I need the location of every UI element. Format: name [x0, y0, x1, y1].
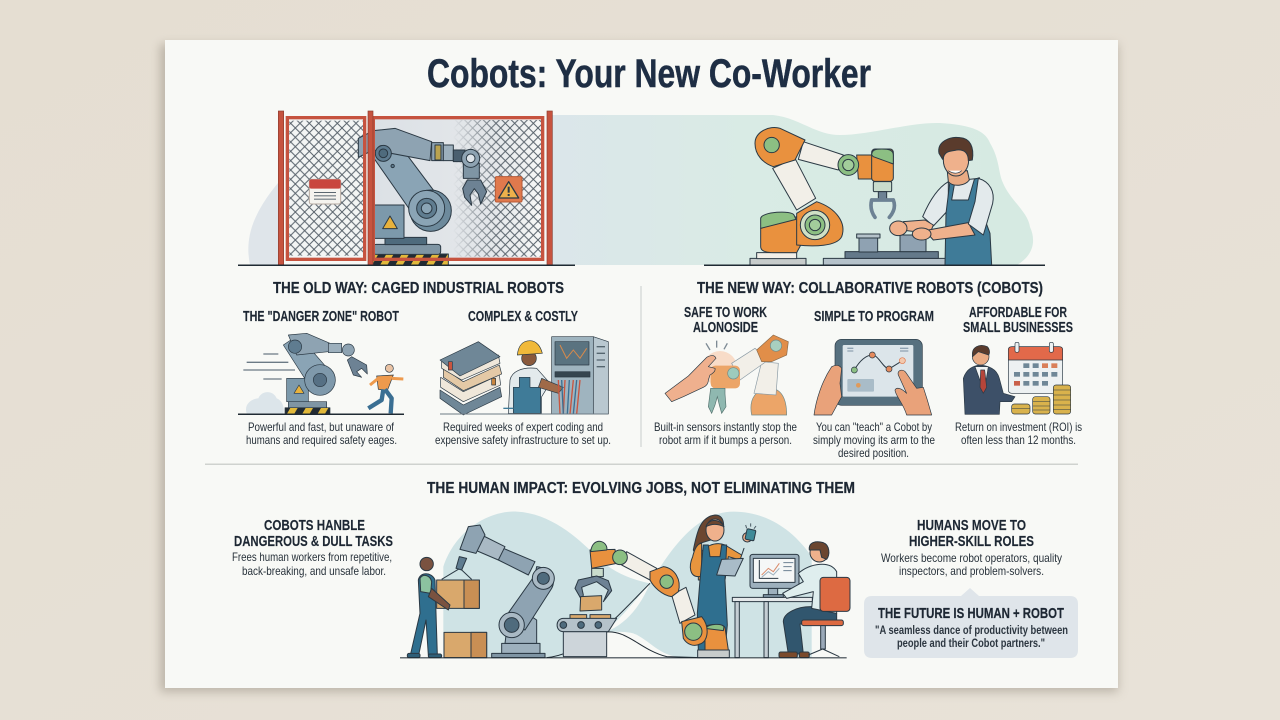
vertical divider: [640, 286, 642, 447]
text block: higher-skill roles: [881, 518, 1062, 578]
card: safe to work alongside: [654, 305, 797, 447]
monitor chart: [762, 563, 793, 577]
card: complex and costly: [435, 309, 611, 447]
icon: fast robot and running person: [243, 333, 403, 414]
text block: higher-skill roles: HUMANS MOVE TO: [917, 518, 1026, 534]
card description: simply moving its arm to the: [813, 433, 935, 447]
ground line: [400, 656, 847, 659]
warning sign with orange triangle: [495, 177, 522, 202]
icon: hand touching cobot: [665, 335, 788, 415]
callout: the future is human + robot: people and their Cobot partners.": [897, 636, 1045, 650]
card heading: [684, 305, 767, 336]
ground line: old way: [238, 264, 575, 266]
red fence frame and posts: [278, 111, 552, 265]
icon: businessman, calendar and coins: [963, 342, 1071, 414]
grey robot lifting box with person: [407, 525, 554, 658]
text block: higher-skill roles: inspectors, and problem-solvers.: [899, 564, 1044, 578]
ground line: [440, 414, 608, 415]
heading: new way: THE NEW WAY: COLLABORATIVE ROBOTS (COBOTS): [697, 280, 1043, 297]
card description: [246, 420, 397, 447]
card description: [813, 420, 935, 460]
text block: higher-skill roles: HIGHER-SKILL ROLES: [909, 534, 1034, 550]
title: Cobots: Your New Co-Worker: [427, 52, 871, 96]
orange cobot with box: [575, 541, 729, 658]
fence panel backgrounds: [287, 118, 543, 260]
card description: [955, 420, 1082, 447]
conveyor with boxes: [557, 615, 617, 657]
card description: Required weeks of expert coding and: [443, 420, 603, 434]
card description: expensive safety infrastructure to set up.: [435, 433, 611, 447]
heading: human impact: THE HUMAN IMPACT: EVOLVING JOBS, NOT ELIMINATING THEM: [427, 480, 855, 497]
callout: the future is human + robot: [864, 588, 1078, 658]
collaborative robot arm: [750, 127, 893, 265]
card heading: ALONOSIDE: [693, 320, 758, 336]
card heading: SIMPLE TO PROGRAM: [814, 309, 934, 325]
teal infinity blob: [443, 512, 812, 657]
callout: the future is human + robot: THE FUTURE IS HUMAN + ROBOT: [878, 605, 1064, 622]
poster shadow: [160, 44, 1118, 692]
card description: Return on investment (ROI) is: [955, 420, 1082, 434]
card description: Built-in sensors instantly stop the: [654, 420, 797, 434]
card description: desired position.: [838, 446, 909, 460]
cobot gripper: [871, 200, 894, 217]
callout: the future is human + robot: "A seamless dance of productivity between: [875, 623, 1068, 637]
illustration: human and robot teamwork: [400, 512, 850, 658]
text block: dangerous and dull tasks: back-breaking, and unsafe labor.: [242, 564, 386, 578]
card heading: AFFORDABLE FOR: [969, 305, 1067, 321]
left chain-link mesh: [289, 121, 363, 256]
card heading: [963, 305, 1073, 336]
danger notice sign: [309, 179, 341, 204]
text block: dangerous and dull tasks: COBOTS HANBLE: [264, 518, 365, 534]
text block: dangerous and dull tasks: Frees human workers from repetitive,: [232, 550, 392, 564]
worker in blue apron: [890, 137, 993, 265]
poster sheet: [165, 40, 1118, 688]
text block: dangerous and dull tasks: [232, 518, 393, 578]
illustration: caged industrial robot: [278, 111, 552, 265]
card description: humans and required safety eages.: [246, 433, 397, 447]
card heading: SMALL BUSINESSES: [963, 320, 1073, 336]
card heading: COMPLEX & COSTLY: [468, 309, 578, 325]
card: affordable for small businesses: [955, 305, 1082, 447]
text block: higher-skill roles: Workers become robot operators, quality: [881, 551, 1062, 565]
spark lines: [746, 523, 756, 529]
right chain-link mesh: [456, 120, 541, 257]
horizontal divider: [205, 464, 1078, 465]
card description: often less than 12 months.: [961, 433, 1076, 447]
card description: You can "teach" a Cobot by: [816, 420, 932, 434]
card heading: THE "DANGER ZONE" ROBOT: [243, 309, 399, 325]
card: danger zone robot: [238, 309, 404, 447]
flowing S-curves: [547, 583, 700, 658]
card description: robot arm if it bumps a person.: [659, 433, 792, 447]
icon: manuals and technician wiring cabinet: [440, 337, 608, 415]
woman with tablet and phone: [690, 515, 756, 650]
industrial robot arm: [358, 128, 487, 265]
desk, monitor and seated engineer: [732, 542, 850, 658]
card heading: SAFE TO WORK: [684, 305, 767, 321]
card description: Powerful and fast, but unaware of: [248, 420, 395, 434]
illustration: cobot and worker: [750, 127, 993, 265]
text block: dangerous and dull tasks: DANGEROUS & DULL TASKS: [234, 534, 393, 550]
workbench with parts: [823, 234, 960, 265]
hero background blob: [248, 115, 1033, 265]
card description: [654, 420, 797, 447]
ground line: [238, 414, 404, 415]
ground line: new way: [704, 264, 1045, 266]
heading: old way: THE OLD WAY: CAGED INDUSTRIAL ROBOTS: [273, 280, 564, 297]
card description: [435, 420, 611, 447]
icon: tablet with hands: [814, 339, 932, 415]
card: simple to program: [813, 309, 935, 460]
